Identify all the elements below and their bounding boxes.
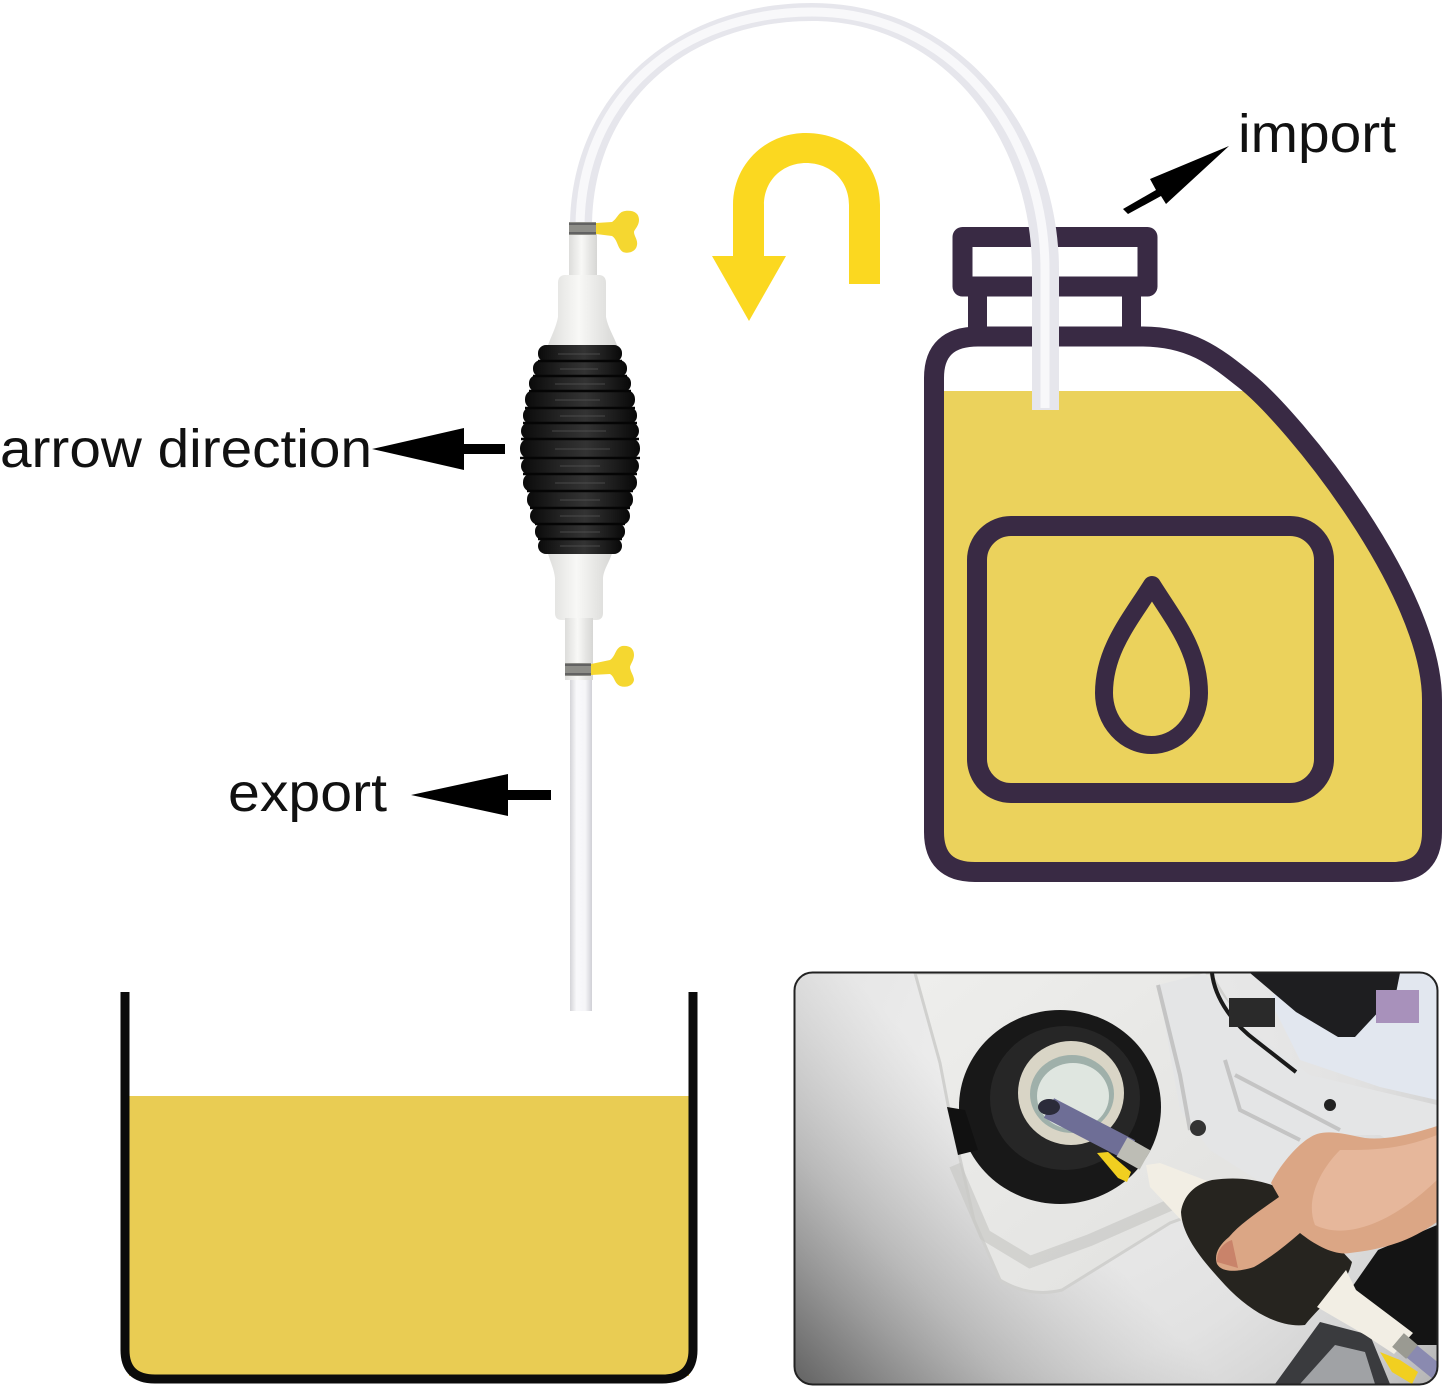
export arrow (411, 774, 551, 816)
lower tube stub (565, 618, 593, 680)
arrow direction arrow (372, 428, 505, 470)
lower clamp (565, 646, 634, 687)
bulb ridges (520, 361, 640, 539)
seal tab (947, 1107, 970, 1155)
wire and plug (1212, 973, 1296, 1072)
container outline (125, 992, 693, 1379)
upper connector (547, 275, 618, 348)
fuel cap hanging (1250, 973, 1400, 1037)
label: import: import (1238, 104, 1396, 164)
jug cap (962, 237, 1148, 286)
pump bulb (1181, 1178, 1352, 1325)
photo border (794, 972, 1438, 1384)
seal inner shade (990, 1026, 1140, 1170)
hinge shading (1158, 985, 1340, 1140)
hand pump (520, 228, 640, 680)
filler inner (1030, 1055, 1114, 1133)
siphon hose (570, 3, 1059, 1011)
dark lower left shading (796, 979, 1164, 1384)
label: export: export (228, 763, 387, 823)
hand (1216, 1126, 1437, 1271)
grimy recess edge (955, 1165, 1170, 1262)
upper clamp (569, 211, 639, 253)
import arrow (1123, 146, 1229, 214)
lower collar (1398, 1340, 1412, 1352)
photo: pump in use at fuel filler (794, 972, 1438, 1384)
jug of oil (934, 237, 1432, 872)
rubber seal (959, 1010, 1161, 1204)
bulb highlights (552, 354, 610, 546)
hole and bolt (1324, 1099, 1336, 1111)
metal collar (1122, 1147, 1145, 1160)
lower yellow clamp (1380, 1352, 1418, 1384)
yellow U-turn arrow (712, 133, 880, 321)
fingernail (1217, 1240, 1238, 1268)
jug neck (978, 287, 1132, 337)
upper tube stub (569, 228, 597, 278)
lower tube (1404, 1345, 1437, 1372)
pump neck (1146, 1163, 1210, 1222)
oil container below (125, 992, 693, 1379)
tube end (1038, 1099, 1060, 1115)
lower connector (547, 550, 613, 620)
filler ring (1018, 1041, 1124, 1145)
tire (1350, 1225, 1437, 1345)
oil in container (129, 1096, 689, 1376)
cover interior, blue-white (1270, 973, 1437, 1100)
oil fill (944, 391, 1422, 862)
hand highlight (1312, 1135, 1437, 1231)
wheel rim (1275, 1322, 1390, 1384)
black bulb (520, 345, 640, 554)
yellow clamp (1097, 1152, 1131, 1182)
oil drop icon (1104, 585, 1199, 745)
fuel flap recess (914, 974, 1229, 1294)
lower tube (570, 676, 592, 1011)
tube in filler (1049, 1108, 1130, 1150)
jug body outline (934, 336, 1432, 872)
lower pump neck (1317, 1270, 1413, 1354)
label: arrow direction: arrow direction (0, 419, 372, 479)
hinge panel (1200, 974, 1436, 1183)
jug label (977, 526, 1324, 793)
sticker (1376, 990, 1419, 1023)
